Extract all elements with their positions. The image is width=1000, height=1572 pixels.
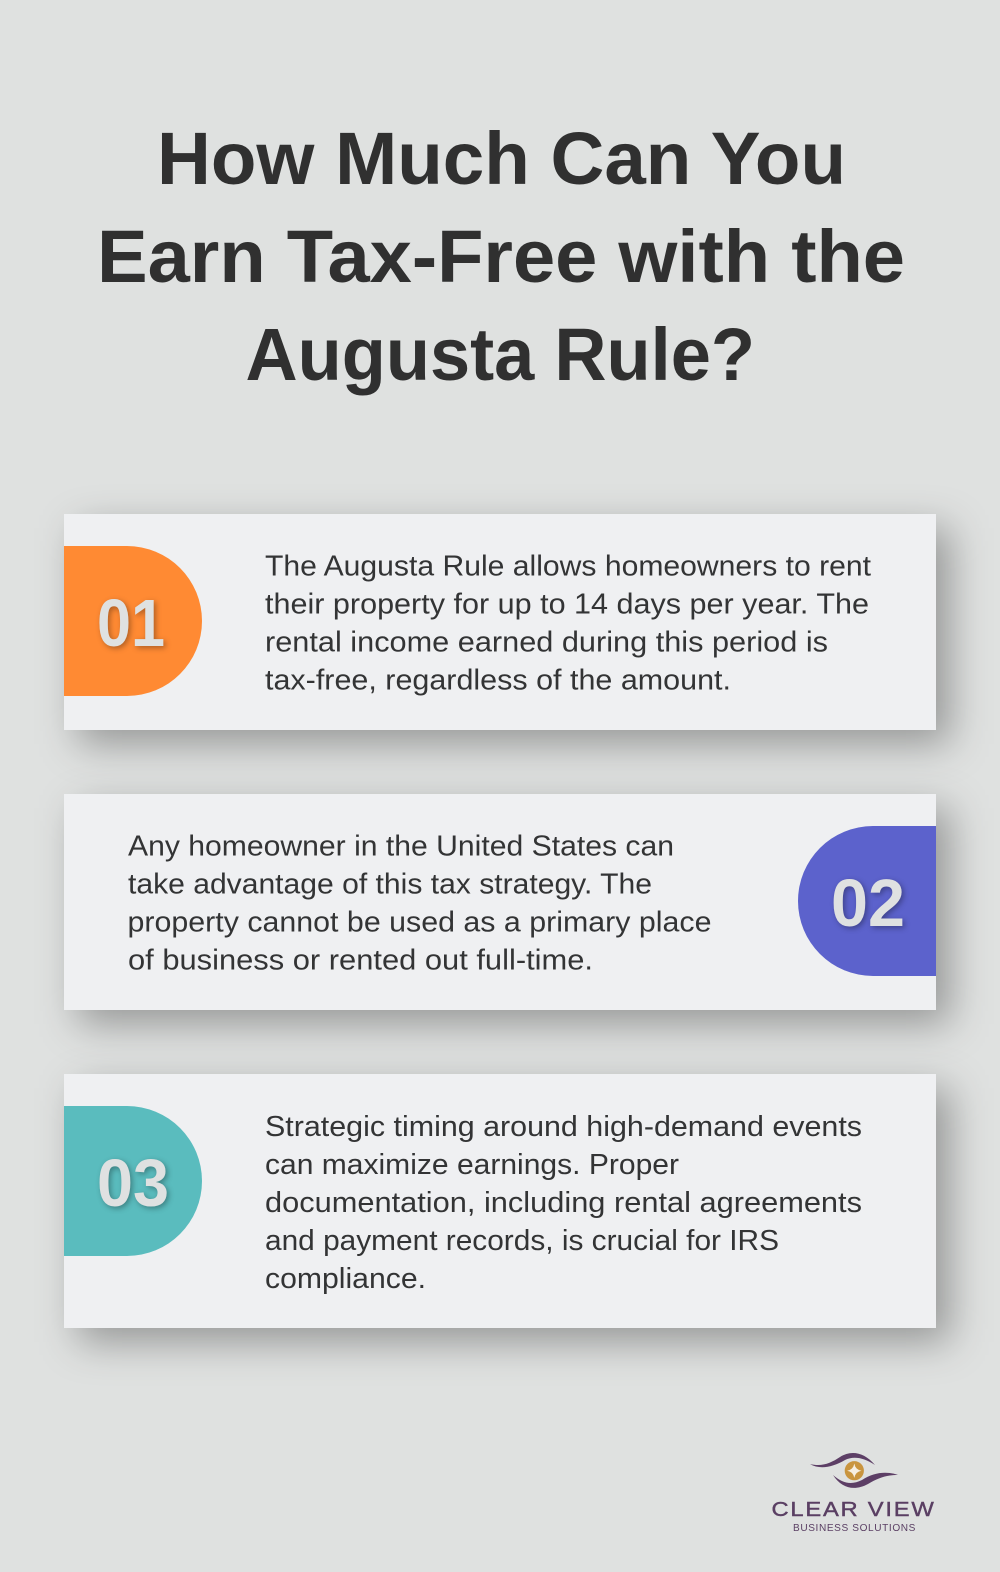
title: Earn Tax-Free with the — [97, 215, 905, 298]
text: step 01 description: their property for up to 14 days per year. The — [265, 588, 869, 620]
logo tagline: BUSINESS SOLUTIONS — [793, 1523, 916, 1534]
text: step 02 description — [128, 830, 712, 976]
text: step 03 description: documentation, including rental agreements — [265, 1187, 862, 1219]
text: step 02 description: Any homeowner in the United States can — [128, 830, 674, 862]
panel: step 01 — [64, 514, 950, 744]
badge: 02 — [798, 826, 936, 976]
badge: 03 — [64, 1106, 202, 1256]
title: Augusta Rule? — [246, 313, 755, 396]
text: step 03 description: can maximize earnings. Proper — [265, 1149, 679, 1181]
text: step 02 description: take advantage of this tax strategy. The — [128, 868, 652, 900]
title: How Much Can You — [157, 117, 846, 200]
text: step 03 description: and payment records, is crucial for IRS — [265, 1225, 779, 1257]
text: step 03 description: compliance. — [265, 1263, 426, 1295]
logo wordmark: CLEAR VIEW — [772, 1498, 936, 1521]
text: step 01 description — [265, 550, 871, 696]
logo: Clear View Business Solutions — [772, 1453, 936, 1534]
panel: step 02 — [64, 794, 950, 1024]
text: step 02 description: of business or rented out full-time. — [128, 944, 593, 976]
text: step 02 description: property cannot be used as a primary place — [128, 906, 712, 938]
title — [97, 117, 905, 396]
text: step 03 description: Strategic timing around high-demand events — [265, 1111, 862, 1143]
badge: 02: 02 — [831, 866, 905, 941]
badge: 03: 03 — [97, 1146, 169, 1221]
text: step 03 description — [265, 1111, 862, 1295]
icon: eye — [810, 1453, 898, 1488]
badge: 01: 01 — [97, 586, 165, 661]
badge: 01 — [64, 546, 202, 696]
text: step 01 description: rental income earned during this period is — [265, 626, 828, 658]
text: step 01 description: tax-free, regardless of the amount. — [265, 664, 731, 696]
panel: step 03 — [64, 1074, 950, 1342]
text: step 01 description: The Augusta Rule allows homeowners to rent — [265, 550, 871, 582]
